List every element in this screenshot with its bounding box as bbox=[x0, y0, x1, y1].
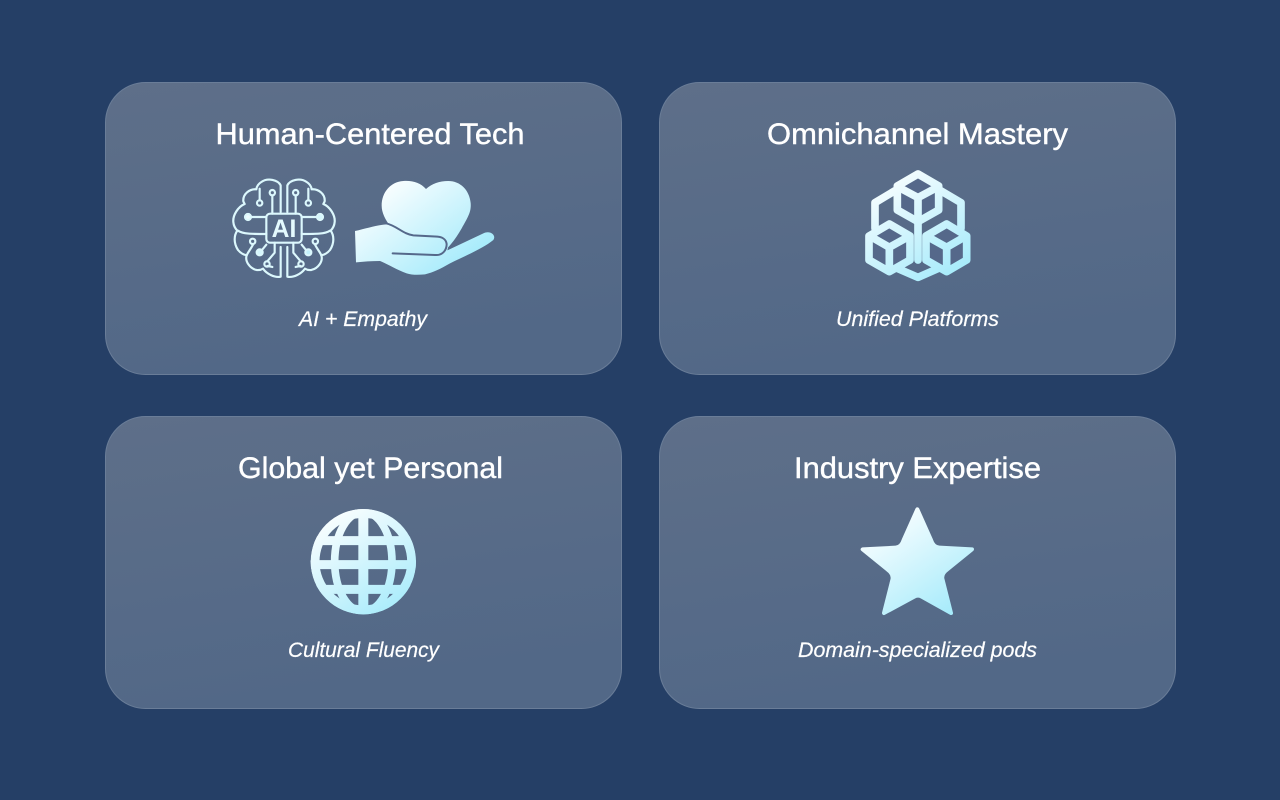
icon: AI brain bbox=[233, 180, 335, 277]
heading: Omnichannel Mastery: Omnichannel Mastery bbox=[767, 118, 1068, 151]
panel: Industry Expertise bbox=[660, 416, 1176, 708]
icon: hand holding heart bbox=[355, 181, 494, 275]
caption: Cultural Fluency: Cultural Fluency bbox=[288, 639, 440, 662]
icon: globe bbox=[308, 510, 418, 613]
panel: Human-Centered Tech bbox=[106, 82, 622, 374]
heading: Industry Expertise: Industry Expertise bbox=[794, 452, 1041, 485]
caption: AI + Empathy: AI + Empathy bbox=[297, 308, 429, 331]
icon: AI brain: AI bbox=[272, 216, 296, 243]
heading: Global yet Personal: Global yet Personal bbox=[238, 452, 503, 485]
icon: connected cubes bbox=[869, 174, 967, 277]
panel: Global yet Personal bbox=[106, 416, 622, 708]
caption: Unified Platforms: Unified Platforms bbox=[836, 308, 1000, 331]
heading: Human-Centered Tech: Human-Centered Tech bbox=[216, 118, 524, 151]
panel: Omnichannel Mastery bbox=[660, 82, 1176, 374]
icon: star bbox=[863, 509, 972, 613]
caption: Domain-specialized pods: Domain-specialized pods bbox=[798, 639, 1038, 662]
